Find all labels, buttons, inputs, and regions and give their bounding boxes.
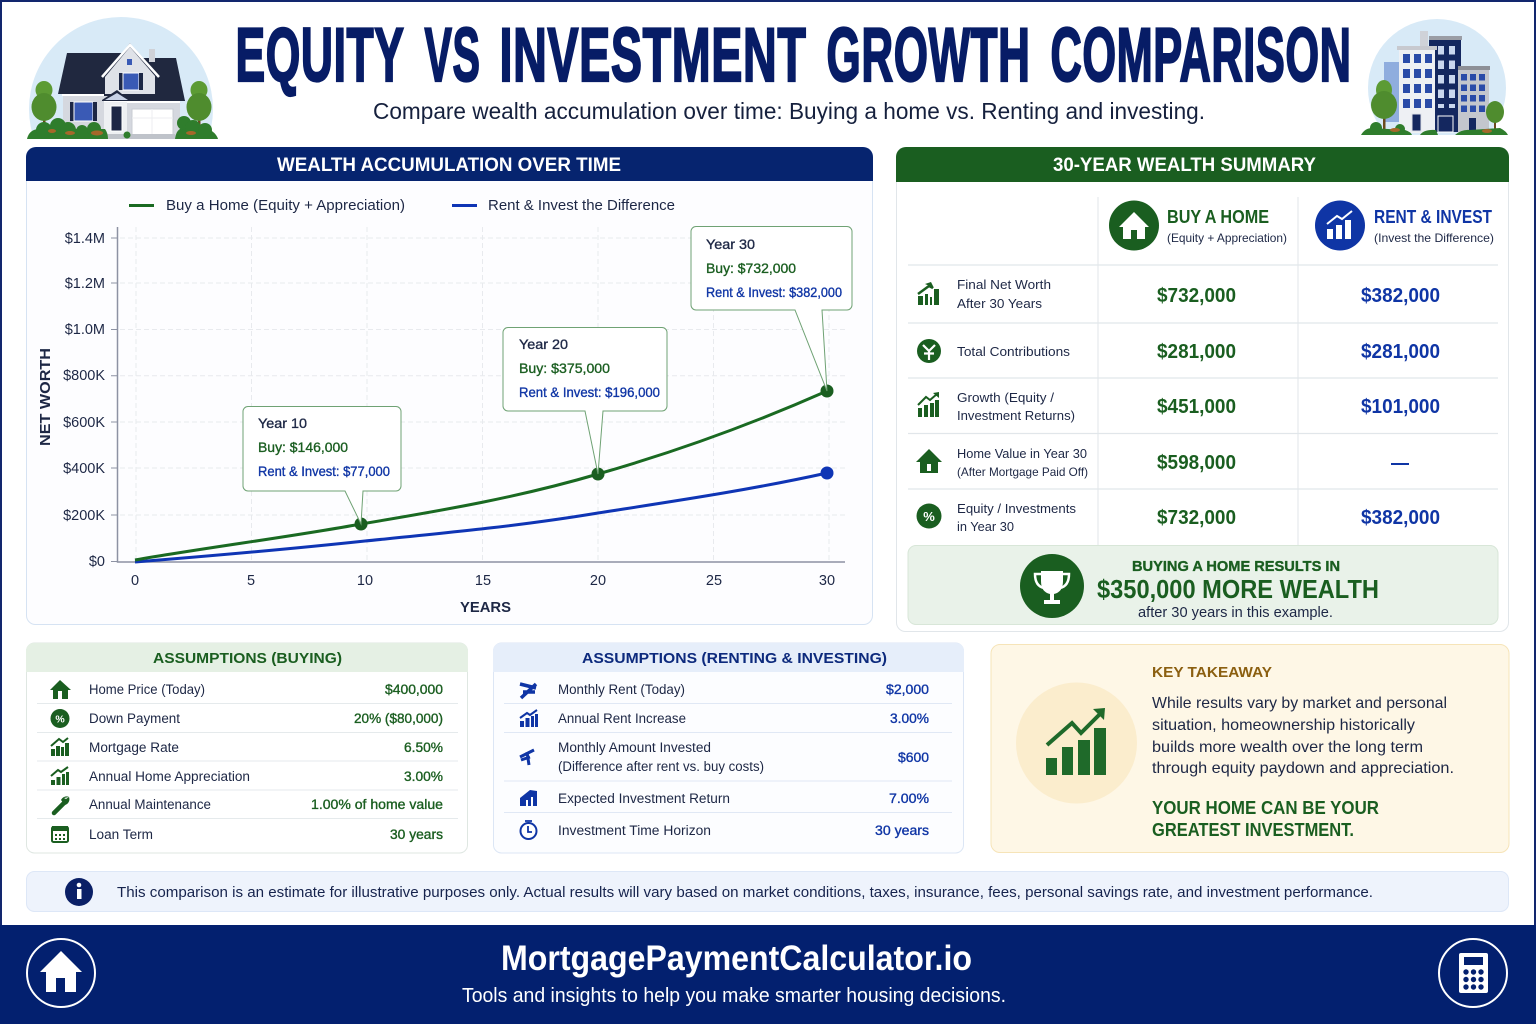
y axis labels: $0 — [89, 554, 105, 570]
line chart: net worth by year — [37, 226, 852, 616]
x axis labels: 5 — [247, 573, 255, 589]
text: takeaway conclusion: YOUR HOME CAN BE YOUR — [1152, 798, 1379, 818]
callout: year 10: Buy: $146,000 — [258, 439, 348, 455]
row: mortgage rate: Mortgage Rate — [89, 740, 179, 755]
column header: rent and invest: (Invest the Difference) — [1374, 231, 1494, 245]
illustration: suburban house — [27, 17, 218, 139]
row: equity and investments: % — [923, 509, 935, 524]
row: total contributions: $281,000 — [1157, 341, 1236, 363]
text: takeaway paragraph: builds more wealth over the long term — [1152, 739, 1423, 756]
row: final net worth: Final Net Worth — [957, 277, 1051, 292]
title: VS — [424, 13, 480, 98]
text: takeaway conclusion: GREATEST INVESTMENT. — [1152, 820, 1354, 840]
row: annual rent increase: 3.00% — [890, 711, 929, 726]
row: mortgage rate: 6.50% — [404, 740, 443, 755]
row: growth: $101,000 — [1361, 396, 1440, 418]
row: total contributions — [917, 339, 1440, 363]
row: expected investment return: 7.00% — [889, 791, 929, 806]
callout: year 20: Year 20 — [519, 336, 568, 352]
row: expected investment return — [520, 790, 929, 806]
row: mortgage rate — [51, 738, 443, 756]
y axis labels — [63, 231, 105, 570]
row: annual rent increase — [520, 710, 929, 727]
row: total contributions: $281,000 — [1361, 341, 1440, 363]
title: GROWTH — [826, 13, 1030, 98]
row: growth: $451,000 — [1157, 396, 1236, 418]
y axis labels: $1.2M — [65, 276, 105, 292]
panel: assumptions buying — [26, 643, 468, 853]
chart legend: Buy a Home (Equity + Appreciation) — [166, 197, 405, 214]
row: down payment: Down Payment — [89, 711, 180, 726]
axis title: net worth: NET WORTH — [37, 348, 54, 446]
callout: wealth difference: $350,000 MORE WEALTH — [1097, 574, 1379, 604]
callout: year 10 — [243, 406, 401, 524]
row: final net worth — [918, 277, 1440, 311]
panel: key takeaway — [991, 644, 1509, 852]
disclaimer bar — [26, 872, 1508, 912]
subtitle: Compare wealth accumulation over time: Buying a home vs. Renting and investing. — [373, 98, 1205, 124]
heading: assumptions renting: ASSUMPTIONS (RENTING & INVESTING) — [582, 650, 887, 667]
row: home value: (After Mortgage Paid Off) — [957, 465, 1088, 479]
text: takeaway paragraph: While results vary by market and personal — [1152, 695, 1447, 712]
callout: wealth difference: BUYING A HOME RESULTS IN — [1132, 559, 1340, 575]
row: equity and investments — [916, 501, 1440, 534]
callout: year 30: Buy: $732,000 — [706, 260, 796, 276]
callout: wealth difference — [908, 546, 1498, 624]
row: loan term: 30 years — [390, 827, 443, 842]
x axis labels: 10 — [357, 573, 373, 589]
row: expected investment return: Expected Investment Return — [558, 791, 730, 806]
row: monthly amount invested: $600 — [898, 750, 929, 765]
x axis labels: 30 — [819, 573, 835, 589]
title: EQUITY — [236, 13, 404, 98]
y axis labels: $400K — [63, 461, 105, 477]
text: takeaway conclusion — [1152, 798, 1379, 840]
x axis labels: 20 — [590, 573, 606, 589]
panel: wealth accumulation over time — [26, 147, 873, 624]
y axis labels: $1.0M — [65, 322, 105, 338]
column header: buy a home — [1109, 200, 1287, 250]
footer: Tools and insights to help you make smarter housing decisions. — [462, 985, 1006, 1007]
heading: assumptions buying: ASSUMPTIONS (BUYING) — [153, 650, 342, 667]
row: home price: $400,000 — [385, 682, 443, 697]
series: buy a home — [135, 391, 827, 560]
column header: rent and invest: RENT & INVEST — [1374, 207, 1492, 227]
row: monthly rent: Monthly Rent (Today) — [558, 682, 685, 697]
y axis labels: $600K — [63, 415, 105, 431]
row: monthly rent: $2,000 — [886, 682, 929, 697]
panel heading: wealth accumulation: WEALTH ACCUMULATION OVER TIME — [277, 155, 621, 176]
title: INVESTMENT — [500, 13, 806, 98]
footer: MortgagePaymentCalculator.io — [501, 939, 972, 978]
chart legend: Rent & Invest the Difference — [488, 197, 675, 214]
callout: year 30: Year 30 — [706, 236, 755, 252]
row: investment time horizon: Investment Time Horizon — [558, 823, 711, 838]
x axis labels: 15 — [475, 573, 491, 589]
row: growth: Growth (Equity / — [957, 390, 1054, 405]
row: annual rent increase: Annual Rent Increase — [558, 711, 686, 726]
icon: calculator — [1439, 939, 1507, 1007]
callout: year 20: Rent & Invest: $196,000 — [519, 384, 660, 400]
row: annual home appreciation — [51, 767, 443, 785]
row: home price — [50, 680, 443, 699]
row: loan term: Loan Term — [89, 827, 153, 842]
panel heading: summary: 30-YEAR WEALTH SUMMARY — [1053, 155, 1316, 176]
row: equity and investments: in Year 30 — [957, 519, 1014, 534]
column header: buy a home: (Equity + Appreciation) — [1167, 231, 1287, 245]
text: takeaway paragraph — [1152, 695, 1454, 777]
row: home value: Home Value in Year 30 — [957, 446, 1087, 461]
x axis labels: 25 — [706, 573, 722, 589]
row: monthly amount invested — [520, 740, 929, 774]
row: growth: Investment Returns) — [957, 408, 1075, 423]
panel heading: wealth accumulation — [26, 147, 873, 181]
callout: year 20: Buy: $375,000 — [519, 360, 610, 376]
row: annual home appreciation: 3.00% — [404, 769, 443, 784]
y axis labels: $200K — [63, 508, 105, 524]
row: home value: $598,000 — [1157, 452, 1236, 474]
row: down payment — [50, 709, 443, 728]
series: rent and invest — [135, 473, 827, 562]
panel heading: summary — [896, 147, 1509, 182]
row: investment time horizon — [520, 821, 929, 839]
y axis labels: $1.4M — [65, 231, 105, 247]
callout: wealth difference: after 30 years in this example. — [1138, 604, 1333, 621]
heading: assumptions buying — [26, 643, 468, 672]
row: annual maintenance — [54, 796, 443, 813]
row: equity and investments: $382,000 — [1361, 507, 1440, 529]
heading: assumptions renting — [493, 643, 964, 672]
icon: growth chart — [1016, 682, 1137, 804]
row: monthly amount invested: Monthly Amount Invested — [558, 740, 711, 755]
row: annual maintenance: 1.00% of home value — [311, 797, 443, 812]
y axis labels: $800K — [63, 368, 105, 384]
icon: trophy — [1020, 554, 1084, 618]
row: monthly amount invested: (Difference after rent vs. buy costs) — [558, 759, 764, 774]
callout: year 20 — [503, 328, 667, 474]
illustration: apartment buildings — [1361, 19, 1508, 135]
row: final net worth: $382,000 — [1361, 285, 1440, 307]
icon: home — [27, 939, 95, 1007]
column header: buy a home: BUY A HOME — [1167, 207, 1269, 227]
disclaimer bar: This comparison is an estimate for illustrative purposes only. Actual results will vary based on market conditions, taxes, insurance, fees, personal savings rate, and investment performance. — [117, 884, 1373, 901]
panel: 30-year wealth summary — [896, 147, 1509, 632]
axis title: years: YEARS — [460, 599, 511, 616]
row: annual home appreciation: Annual Home Appreciation — [89, 769, 250, 784]
row: final net worth: After 30 Years — [957, 296, 1043, 311]
callout: year 30 — [691, 226, 852, 391]
panel: key takeaway: KEY TAKEAWAY — [1152, 664, 1272, 681]
icon: info — [65, 878, 93, 906]
callout: year 10: Rent & Invest: $77,000 — [258, 463, 390, 479]
row: home value — [916, 446, 1409, 479]
row: equity and investments: $732,000 — [1157, 507, 1236, 529]
callout: year 10: Year 10 — [258, 415, 307, 431]
row: down payment: % — [55, 714, 65, 726]
row: home price: Home Price (Today) — [89, 682, 205, 697]
row: annual maintenance: Annual Maintenance — [89, 797, 211, 812]
row: equity and investments: Equity / Investments — [957, 501, 1076, 516]
panel: assumptions renting and investing — [493, 643, 964, 853]
text: takeaway paragraph: situation, homeownership historically — [1152, 717, 1415, 734]
footer — [0, 925, 1536, 1024]
title — [236, 13, 1352, 98]
row: down payment: 20% ($80,000) — [354, 711, 443, 726]
chart legend — [129, 197, 675, 214]
row: total contributions: Total Contributions — [957, 344, 1071, 359]
x axis labels — [131, 573, 835, 589]
x axis labels: 0 — [131, 573, 139, 589]
row: loan term — [52, 826, 443, 842]
row: monthly rent — [520, 682, 929, 698]
column header: rent and invest — [1315, 200, 1494, 250]
row: growth — [918, 390, 1440, 423]
callout: year 30: Rent & Invest: $382,000 — [706, 284, 842, 300]
text: takeaway paragraph: through equity paydown and appreciation. — [1152, 760, 1454, 777]
row: investment time horizon: 30 years — [875, 823, 929, 838]
row: final net worth: $732,000 — [1157, 285, 1236, 307]
